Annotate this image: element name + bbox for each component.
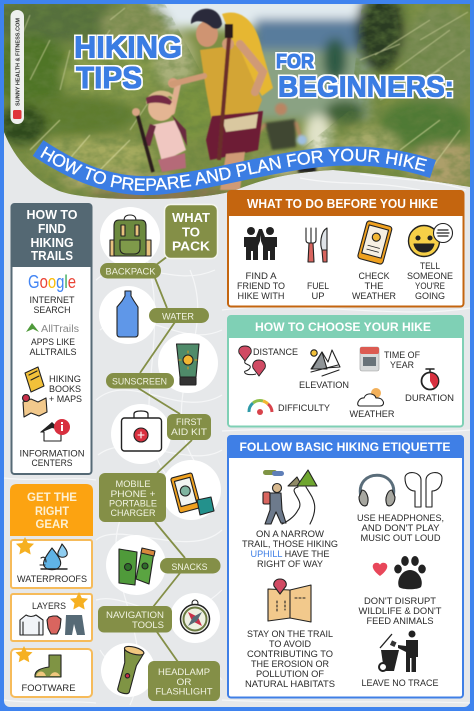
icon: person using trash bin: [379, 630, 418, 672]
label: sunscreen: [106, 373, 174, 388]
icon: fork and knife: [306, 228, 327, 262]
label: headlamp or flashlight: FLASHLIGHT: [156, 686, 213, 698]
icon: trail map with pin: [268, 579, 311, 622]
panel: what to do before you hike: [227, 190, 464, 306]
text: stay on the trail: TO AVOID: [269, 639, 311, 650]
logo strip: Sunny Health & Fitness: [10, 10, 24, 124]
text: use headphones: USE HEADPHONES,: [357, 513, 444, 524]
text: apps like alltrails: ALLTRAILS: [30, 347, 76, 358]
text: find a friend to hike with: HIKE WITH: [238, 291, 285, 302]
label: snacks: SNACKS: [172, 562, 208, 573]
text: stay on the trail: CONTRIBUTING TO: [247, 649, 333, 660]
text: tell someone you're going: SOMEONE: [407, 271, 453, 282]
text: use headphones: AND DON'T PLAY: [362, 523, 440, 534]
icon: snack bars: [119, 548, 155, 585]
icon: calendar: [360, 347, 379, 371]
text: internet search: SEARCH: [34, 305, 71, 316]
hero photo: [0, 0, 474, 205]
text: hiking books and maps: HIKING: [49, 374, 81, 385]
icon: high five friends: [244, 227, 277, 260]
text: apps like alltrails: [30, 337, 76, 358]
text: weather: WEATHER: [350, 409, 395, 420]
label: first aid kit: FIRST: [176, 417, 202, 428]
panel header: get the right gear: RIGHT: [35, 504, 70, 518]
card: layers: [11, 592, 92, 641]
icon: sunscreen tube: [176, 344, 199, 385]
icon: water drops: [40, 544, 67, 570]
text: tell someone you're going: GOING: [415, 291, 445, 302]
title: [74, 30, 454, 104]
text: internet search: INTERNET: [30, 295, 75, 306]
title: TIPS: [76, 60, 142, 95]
text: hiking books and maps: BOOKS: [49, 384, 81, 395]
card: waterproofs: [11, 537, 92, 588]
title: FOR: [276, 51, 314, 73]
text: don't disrupt wildlife: [358, 596, 442, 627]
label: navigation tools: NAVIGATION: [106, 610, 164, 621]
text: time of year: [384, 350, 420, 371]
icon: star: [16, 646, 32, 662]
text: fuel up: FUEL: [307, 281, 329, 292]
heading: what to pack: TO: [182, 224, 200, 240]
text: uphill right of way: UPHILL HAVE THE: [250, 549, 330, 560]
text: hiking books and maps: [49, 374, 82, 405]
icon: information center house: [40, 419, 70, 441]
google logo: Google: [28, 271, 76, 292]
text: don't disrupt wildlife: DON'T DISRUPT: [364, 596, 436, 607]
label: navigation tools: [98, 606, 172, 632]
label: backpack: BACKPACK: [106, 266, 156, 278]
grass strokes: [20, 8, 468, 170]
panel header: get the right gear: GEAR: [36, 517, 69, 531]
label: water: WATER: [162, 312, 194, 322]
icon: compass: [180, 600, 210, 634]
text: uphill right of way: ON A NARROW: [256, 529, 324, 540]
label: first aid kit: [167, 414, 211, 440]
panel: how to find hiking trails: [10, 203, 92, 474]
text: duration: DURATION: [405, 393, 454, 404]
text: find a friend to hike with: [237, 271, 285, 302]
text: fuel up: UP: [312, 291, 324, 302]
text: don't disrupt wildlife: FEED ANIMALS: [366, 616, 434, 627]
text: difficulty: DIFFICULTY: [278, 403, 331, 414]
connector lines: [138, 256, 192, 662]
panel header: what to do before you hike: WHAT TO DO BEFORE YOU HIKE: [247, 197, 438, 211]
panel: how to choose your hike: [227, 315, 463, 426]
logo strip: Sunny Health & Fitness: SUNNY HEALTH & FITNESS.COM: [16, 17, 22, 106]
panel header: get the right gear: GET THE: [27, 490, 77, 504]
card: waterproofs: WATERPROOFS: [17, 574, 87, 585]
text: information centers: [20, 448, 85, 469]
icon: paw print: [394, 556, 426, 589]
text: stay on the trail: THE EROSION OR: [251, 659, 329, 670]
text: stay on the trail: POLLUTION OF: [256, 669, 324, 680]
label: sunscreen: SUNSCREEN: [112, 376, 167, 388]
alltrails logo: AllTrails: [41, 324, 79, 335]
icon circle backgrounds: [99, 207, 221, 697]
icon: backpack: [110, 215, 151, 256]
panel header: follow basic hiking etiquette: FOLLOW BASIC HIKING ETIQUETTE: [240, 442, 451, 454]
label: water: [149, 308, 209, 323]
heading: what to pack: PACK: [172, 238, 211, 254]
subtitle ribbon: HOW TO PREPARE AND PLAN FOR YOUR HIKE: [40, 146, 427, 191]
text: distance: DISTANCE: [253, 347, 298, 358]
card: footware: FOOTWARE: [22, 683, 76, 694]
panel header: how to choose your hike: [227, 315, 463, 338]
icon: flashlight: [113, 645, 145, 696]
label: mobile phone and portable charger: [99, 473, 166, 522]
icon: phone with weather: [357, 220, 392, 265]
panel header: what to do before you hike: [227, 190, 464, 216]
icon: duration stopwatch: [422, 369, 438, 390]
text: elevation: ELEVATION: [299, 380, 349, 391]
text: check the weather: THE: [364, 281, 384, 292]
text: tell someone you're going: YOU'RE: [415, 281, 445, 292]
icon: talking smiley: [408, 224, 452, 256]
label: mobile phone and portable charger: PORTABLE: [109, 498, 157, 510]
foliage texture: [4, 4, 470, 200]
icon: sweater: [20, 615, 43, 635]
text: leave no trace: LEAVE NO TRACE: [362, 678, 438, 689]
panel: get the right gear: [10, 484, 93, 697]
icon: weather cloud and sun: [358, 388, 383, 406]
text: time of year: YEAR: [390, 360, 414, 371]
text: stay on the trail: NATURAL HABITATS: [245, 679, 335, 690]
icon: star: [16, 537, 34, 554]
text: check the weather: WEATHER: [352, 291, 396, 302]
panel header: how to find hiking trails: HIKING: [30, 236, 74, 250]
text: internet search: [30, 295, 75, 316]
panel header: how to choose your hike: HOW TO CHOOSE YOUR HIKE: [255, 320, 431, 334]
text: use headphones: MUSIC OUT LOUD: [360, 533, 441, 544]
alltrails logo: [26, 323, 79, 335]
woman hiker: [172, 9, 273, 190]
label: navigation tools: TOOLS: [132, 620, 164, 631]
icon: phone and power bank: [170, 473, 214, 515]
icon: heart: [373, 563, 387, 576]
text: check the weather: CHECK: [358, 271, 390, 282]
text: check the weather: [352, 271, 396, 302]
heading: what to pack: WHAT: [172, 210, 210, 225]
icon: book: [25, 367, 44, 392]
icon: elevation mountains: [311, 350, 340, 376]
text: uphill right of way: TRAIL, THOSE HIKING: [242, 539, 338, 550]
panel header: how to find hiking trails: HOW TO: [26, 208, 78, 222]
text: information centers: INFORMATION: [20, 448, 85, 460]
text: tell someone you're going: TELL: [420, 261, 440, 272]
panel header: how to find hiking trails: TRAILS: [31, 249, 73, 263]
text: find a friend to hike with: FRIEND TO: [237, 281, 285, 292]
icon: star: [70, 592, 88, 610]
photo background: landscape: [0, 0, 474, 205]
text: tell someone you're going: [407, 261, 453, 302]
text: uphill right of way: RIGHT OF WAY: [257, 559, 324, 570]
label: headlamp or flashlight: OR: [176, 677, 192, 688]
icon: first aid kit: [122, 411, 162, 451]
label: mobile phone and portable charger: MOBILE: [116, 479, 150, 490]
label: headlamp or flashlight: [148, 661, 220, 701]
card: footware: [11, 646, 92, 697]
text: stay on the trail: [245, 629, 335, 690]
text: find a friend to hike with: FIND A: [246, 271, 277, 282]
label: backpack: [100, 263, 161, 278]
label: mobile phone and portable charger: CHARGER: [110, 508, 156, 519]
label: mobile phone and portable charger: PHONE +: [110, 489, 156, 500]
label: first aid kit: AID KIT: [171, 427, 207, 438]
panel header: follow basic hiking etiquette: [227, 435, 463, 458]
icon: map: [22, 394, 47, 417]
icon: pants: [65, 615, 85, 635]
text: time of year: TIME OF: [384, 350, 420, 361]
panel header: how to find hiking trails: FIND: [38, 222, 66, 236]
icon: headphones: [359, 475, 395, 506]
icon: gloves: [47, 616, 61, 634]
heading: what to pack: [164, 204, 218, 258]
title: BEGINNERS:: [278, 72, 454, 104]
icon: water bottle: [117, 291, 138, 337]
icon: difficulty gauge: [249, 401, 272, 415]
text: stay on the trail: STAY ON THE TRAIL: [247, 629, 333, 640]
label: snacks: [160, 558, 220, 574]
panel header: get the right gear: [10, 484, 93, 536]
icon: boot: [35, 655, 61, 677]
panel: what to pack chain: [98, 204, 221, 701]
text: uphill right of way: [242, 529, 338, 570]
panel: follow basic hiking etiquette: [227, 435, 463, 698]
text: use headphones: [357, 513, 444, 544]
card: layers: LAYERS: [32, 601, 66, 612]
text: hiking books and maps: + MAPS: [49, 394, 82, 405]
title: HIKING: [74, 30, 182, 64]
label: headlamp or flashlight: HEADLAMP: [158, 667, 210, 678]
icon: hiker on trail: [263, 470, 317, 524]
man in background: [257, 103, 316, 173]
text: don't disrupt wildlife: WILDLIFE & DON'T: [358, 606, 442, 617]
icon: earbuds: [405, 473, 442, 507]
text: apps like alltrails: APPS LIKE: [31, 337, 75, 348]
text: information centers: CENTERS: [32, 458, 72, 469]
child: [132, 78, 187, 172]
icon: distance pins: [239, 346, 265, 376]
text: fuel up: [307, 281, 329, 302]
panel header: how to find hiking trails: [10, 203, 92, 267]
